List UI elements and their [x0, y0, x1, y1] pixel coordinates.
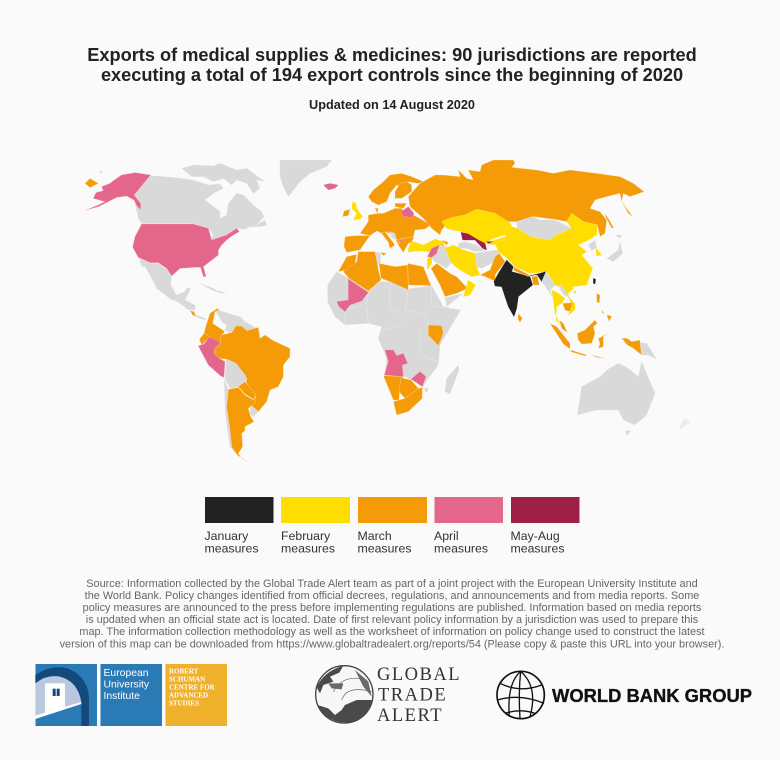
logo: World Bank Group [497, 671, 752, 719]
legend: March: March [358, 529, 392, 543]
logo: Global Trade Alert: ALERT [377, 706, 443, 726]
legend: May-Aug [510, 497, 580, 556]
map: iceland [323, 183, 338, 190]
logo: European University Institute: Institute [104, 691, 140, 702]
title [87, 45, 697, 85]
source note [60, 578, 724, 650]
map: sri lanka [518, 313, 522, 322]
legend: April: April [434, 529, 459, 543]
legend: May-Aug: May-Aug [510, 529, 560, 543]
source note: policy measures are announced to the press before implementing regulations are published. Information based on media reports [83, 602, 702, 614]
logo: Global Trade Alert: TRADE [378, 686, 447, 706]
legend: February: February [281, 529, 331, 543]
source note: map. The information collection methodology as well as the worksheet of information on policy change used to construct the latest [79, 626, 705, 638]
title: executing a total of 194 export controls since the beginning of 2020 [101, 65, 683, 85]
source note: version of this map can be downloaded from https://www.globaltradealert.org/reports/54 (Please copy & paste this URL into your browser). [60, 638, 724, 650]
legend: May-Aug: measures [510, 542, 564, 556]
logo: European University Institute [35, 664, 227, 726]
world map [85, 160, 690, 462]
legend: March: measures [358, 542, 412, 556]
source note: Source: Information collected by the Global Trade Alert team as part of a joint project with the European University Institute and [86, 578, 698, 590]
legend: April [434, 497, 503, 556]
legend: January: January [204, 529, 249, 543]
logo: European University Institute: ROBERT [169, 668, 199, 676]
map: north america [85, 163, 267, 300]
legend: April: measures [434, 542, 488, 556]
logo: European University Institute: University [104, 680, 150, 691]
legend: February: measures [281, 542, 335, 556]
logo: European University Institute: CENTRE FOR [169, 684, 216, 692]
update date: Updated on 14 August 2020 [309, 98, 475, 112]
source note: the World Bank. Policy changes identified from official decrees, regulations, and announcements and from media reports. Some [85, 590, 699, 602]
legend [204, 497, 580, 556]
legend: January: measures [204, 542, 258, 556]
map: central and south america [173, 288, 290, 462]
logo: European University Institute: SCHUMAN [169, 676, 205, 684]
map: africa and arabia [328, 252, 476, 415]
logo: Global Trade Alert: GLOBAL [377, 665, 461, 685]
map: europe [343, 173, 452, 270]
logo: Global Trade Alert [316, 665, 461, 726]
logo: European University Institute: STUDIES [169, 700, 199, 708]
map: greenland [280, 160, 332, 197]
map: southeast asia and oceania [550, 278, 690, 436]
legend: February [281, 497, 350, 556]
logo: European University Institute: European [104, 668, 149, 679]
legend: March [358, 497, 427, 556]
legend: January [204, 497, 274, 556]
source note: is updated when an official state act is located. Date of first relevant policy information by a jurisdiction was used to prepare this [86, 614, 699, 626]
title: Exports of medical supplies & medicines: 90 jurisdictions are reported [87, 45, 697, 65]
map: asia [408, 160, 644, 317]
logo: World Bank Group: WORLD BANK GROUP [552, 685, 752, 706]
logo: European University Institute: ADVANCED [169, 692, 208, 700]
